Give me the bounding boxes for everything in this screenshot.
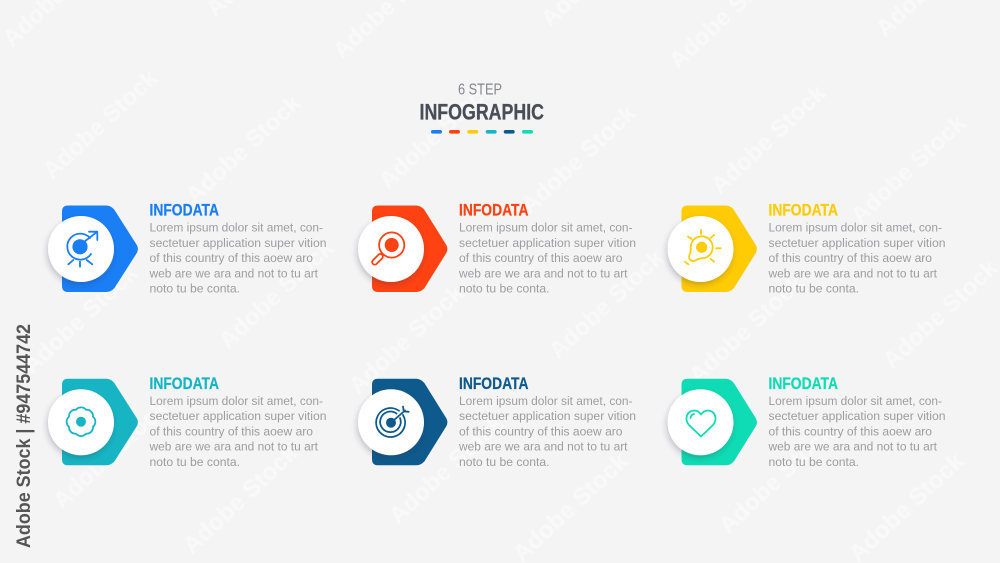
colour dashes xyxy=(431,130,533,134)
text: Adobe Stock xyxy=(38,64,164,184)
body text: sectetuer application super vition xyxy=(459,409,636,423)
body text xyxy=(149,220,327,296)
body text: web are we ara and not to tu art xyxy=(458,440,628,454)
body text: noto tu be conta. xyxy=(459,455,550,469)
body text: of this country of this aoew aro xyxy=(768,424,932,438)
badge: teal hexagon xyxy=(62,379,138,465)
body text: noto tu be conta. xyxy=(768,455,859,469)
text: Adobe Stock xyxy=(544,244,670,364)
body text: Lorem ipsum dolor sit amet, con- xyxy=(768,220,942,234)
heading: INFODATA xyxy=(459,202,529,220)
body text: of this country of this aoew aro xyxy=(150,424,313,438)
body text: sectetuer application super vition xyxy=(150,409,327,423)
body text: web are we ara and not to tu art xyxy=(149,266,319,280)
heading: INFODATA xyxy=(768,375,838,393)
body text: web are we ara and not to tu art xyxy=(768,440,938,454)
icon: magnifier xyxy=(371,232,404,266)
body text: sectetuer application super vition xyxy=(150,236,327,250)
text: Adobe Stock xyxy=(178,439,304,559)
text: Adobe Stock xyxy=(846,109,972,229)
body text: of this country of this aoew aro xyxy=(150,251,313,265)
panel: step 3 xyxy=(668,202,946,296)
heading: INFODATA xyxy=(768,202,838,220)
icon: target with arrow xyxy=(67,232,97,267)
body text: sectetuer application super vition xyxy=(768,236,946,250)
body text: noto tu be conta. xyxy=(150,282,240,296)
panel: step 1 xyxy=(48,202,327,296)
heading: INFODATA xyxy=(459,375,529,393)
heading: INFODATA xyxy=(150,202,219,220)
body text: of this country of this aoew aro xyxy=(459,424,623,438)
icon: light bulb xyxy=(685,230,721,264)
body text: Lorem ipsum dolor sit amet, con- xyxy=(150,220,323,234)
text: Adobe Stock xyxy=(684,269,810,389)
body text: noto tu be conta. xyxy=(459,282,550,296)
body text: sectetuer application super vition xyxy=(768,409,946,423)
badge: mint hexagon xyxy=(682,379,757,465)
text: Adobe Stock xyxy=(714,419,840,539)
title: infographic: INFOGRAPHIC xyxy=(420,99,544,124)
body text: noto tu be conta. xyxy=(768,282,859,296)
icon: bullseye with dart xyxy=(376,406,409,437)
body text xyxy=(768,220,946,296)
text: Adobe Stock xyxy=(48,394,174,514)
badge: yellow hexagon xyxy=(682,206,757,292)
heading: INFODATA xyxy=(150,375,219,393)
panel: step 5 xyxy=(358,375,636,469)
body text: web are we ara and not to tu art xyxy=(768,266,938,280)
body text xyxy=(768,394,946,469)
panel: step 6 xyxy=(668,375,946,469)
text: Adobe Stock xyxy=(878,254,1000,374)
white circle xyxy=(668,389,734,455)
text: Adobe Stock xyxy=(516,99,642,219)
badge: red hexagon xyxy=(372,206,447,292)
badge: navy hexagon xyxy=(372,379,447,465)
body text: Lorem ipsum dolor sit amet, con- xyxy=(459,394,632,408)
white circle xyxy=(358,216,424,282)
text: Adobe Stock xyxy=(706,79,832,199)
heading: 6 step: 6 STEP xyxy=(458,82,502,98)
panel: step 2 xyxy=(358,202,636,296)
text: Adobe Stock xyxy=(181,89,307,209)
white circle xyxy=(48,216,114,282)
body text: web are we ara and not to tu art xyxy=(149,440,319,454)
white circle xyxy=(668,216,734,282)
body text: Lorem ipsum dolor sit amet, con- xyxy=(150,394,323,408)
body text: noto tu be conta. xyxy=(150,455,240,469)
body text xyxy=(458,394,636,469)
icon: flower badge xyxy=(67,407,95,436)
stock id text: Adobe Stock | #947544742 xyxy=(14,324,35,548)
white circle xyxy=(48,389,114,455)
text: Adobe Stock xyxy=(18,259,144,379)
body text: Lorem ipsum dolor sit amet, con- xyxy=(768,394,942,408)
icon: heart xyxy=(686,410,716,436)
body text xyxy=(458,220,636,296)
text: Adobe Stock xyxy=(214,234,340,354)
body text: web are we ara and not to tu art xyxy=(458,266,628,280)
badge: blue hexagon xyxy=(62,206,138,292)
white circle xyxy=(358,389,424,455)
body text: Lorem ipsum dolor sit amet, con- xyxy=(459,220,632,234)
text: Adobe Stock xyxy=(374,74,500,194)
panel: step 4 xyxy=(48,375,327,469)
body text: of this country of this aoew aro xyxy=(768,251,932,265)
body text: sectetuer application super vition xyxy=(459,236,636,250)
body text: of this country of this aoew aro xyxy=(459,251,623,265)
text: Adobe Stock xyxy=(384,409,510,529)
body text xyxy=(149,394,327,469)
text: Adobe Stock xyxy=(344,279,470,399)
